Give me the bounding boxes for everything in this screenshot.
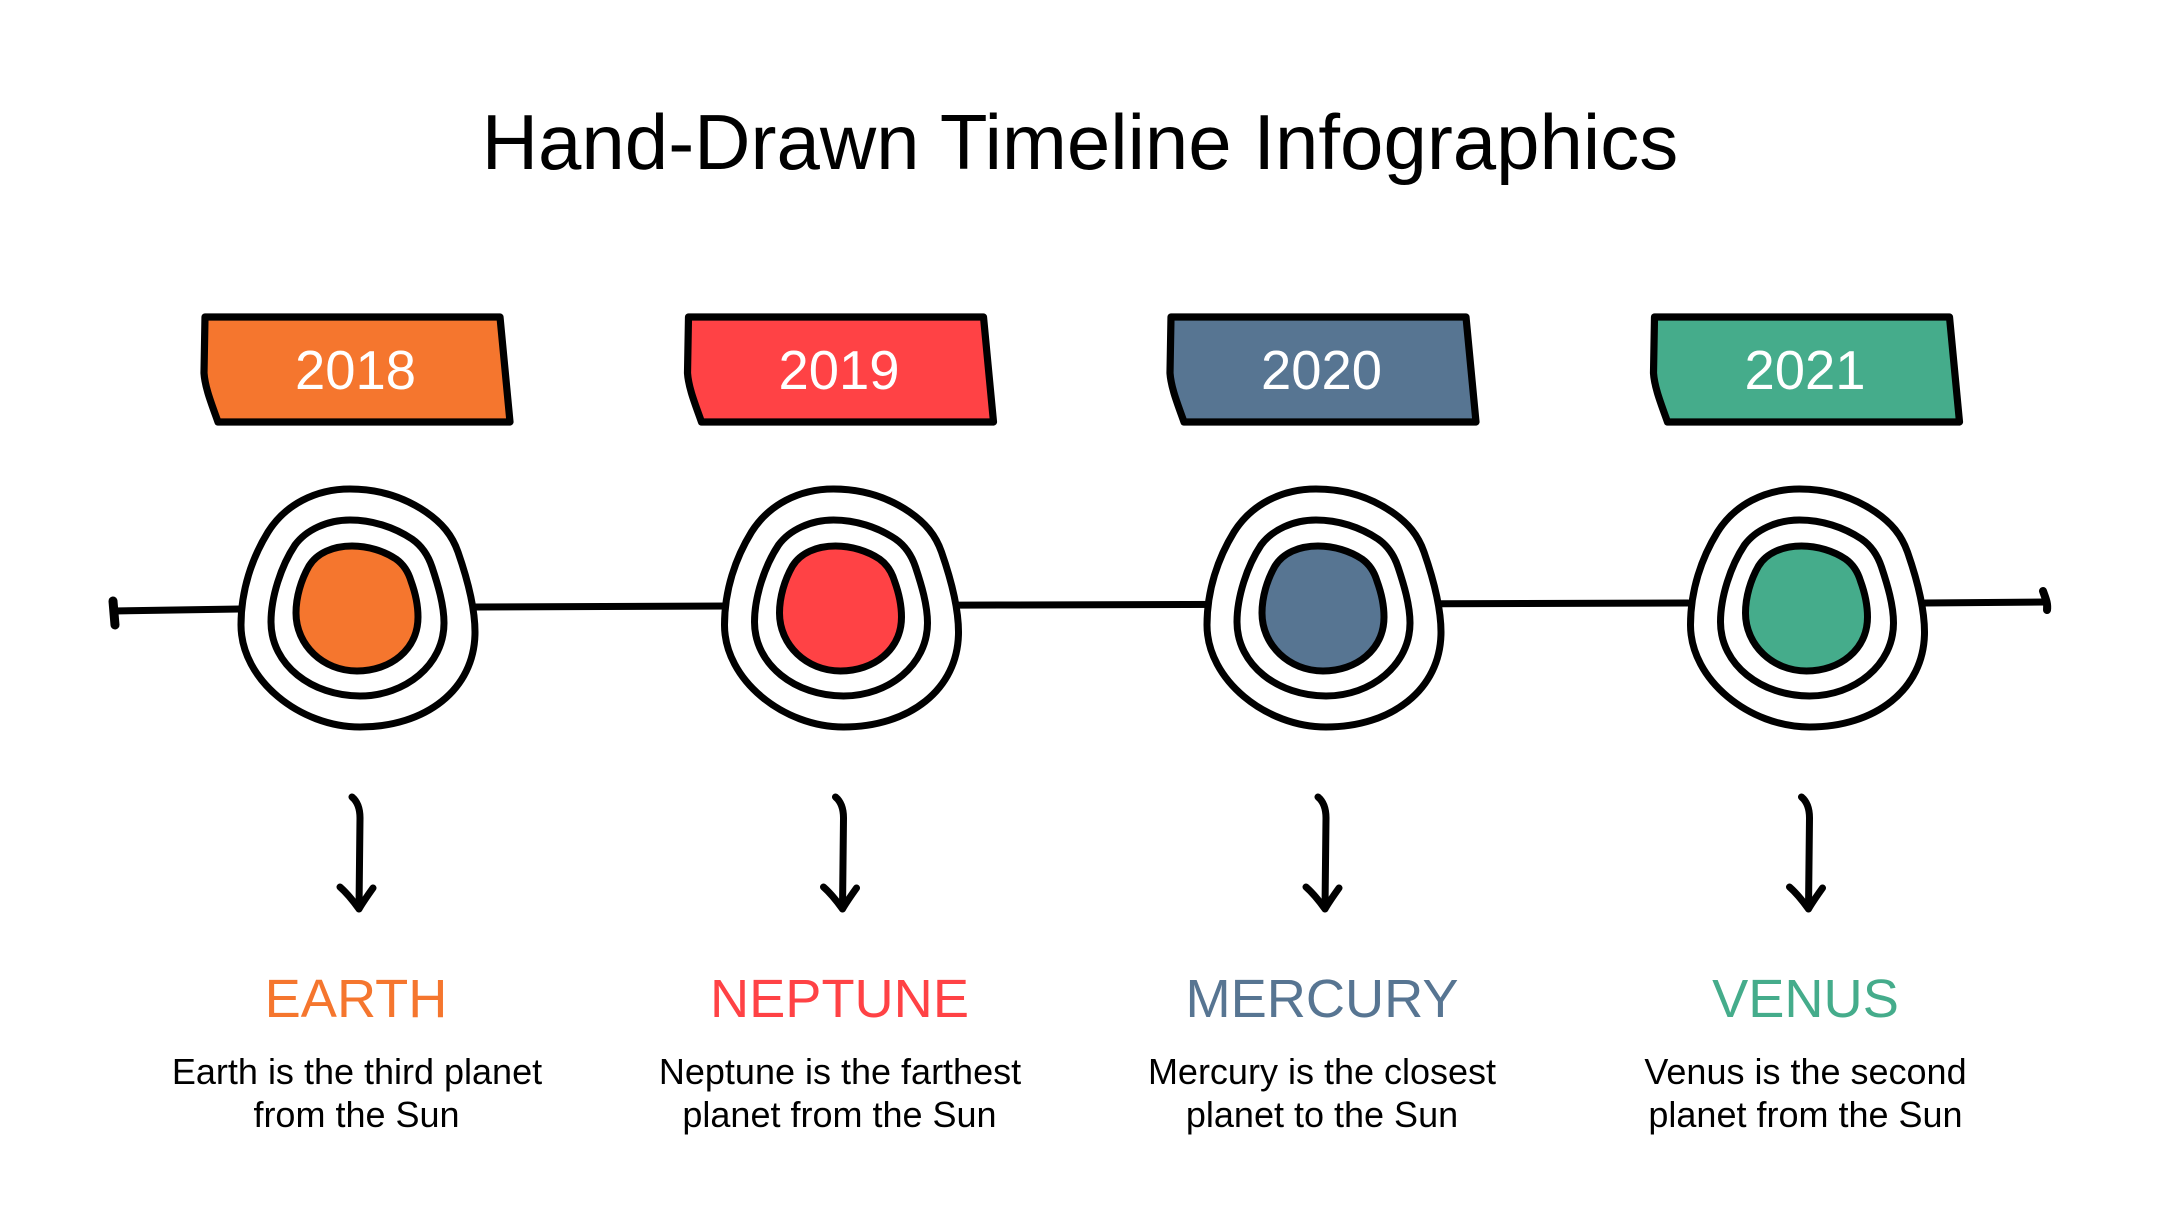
column: 2020 Mercury [1148,317,1496,1135]
title: Hand-Drawn Timeline Infographics [482,98,1678,186]
heading: VENUS: VENUS [1712,969,1899,1029]
column: 2021 Venus [1644,317,1967,1135]
description: Venus: Venus is the second [1644,1051,1967,1092]
arrow: Earth [340,797,373,909]
heading: MERCURY: MERCURY [1186,969,1458,1029]
heading: EARTH: EARTH [265,969,447,1029]
year tag: 2019 [688,317,994,422]
target circle: Earth [241,489,475,727]
year tag: 2018: 2018 [295,340,416,401]
arrow: Mercury [1306,797,1339,909]
description: Earth: from the Sun [253,1094,460,1135]
description: Neptune: Neptune is the farthest [659,1051,1021,1092]
year tag: 2021: 2021 [1744,340,1866,401]
target circle: Neptune [724,489,958,727]
arrow: Neptune [824,797,856,909]
arrow: Venus [1790,797,1822,909]
description: Neptune: planet from the Sun [682,1094,997,1135]
target circle: Venus [1690,489,1924,727]
column: 2019 Neptune [659,317,1021,1135]
timeline axis [113,591,2047,625]
description: Mercury: Mercury is the closest [1148,1051,1496,1092]
year tag: 2021 [1654,317,1960,422]
year tag: 2020 [1170,317,1476,422]
target circle: Mercury [1207,489,1441,727]
year tag: 2019: 2019 [778,340,900,401]
column: 2018 Earth [172,317,542,1135]
description: Earth: Earth is the third planet [172,1051,542,1092]
year tag: 2018 [204,317,510,422]
description: Venus: planet from the Sun [1648,1094,1963,1135]
heading: NEPTUNE: NEPTUNE [710,969,969,1029]
year tag: 2020: 2020 [1261,340,1382,401]
description: Mercury: planet to the Sun [1186,1094,1458,1135]
